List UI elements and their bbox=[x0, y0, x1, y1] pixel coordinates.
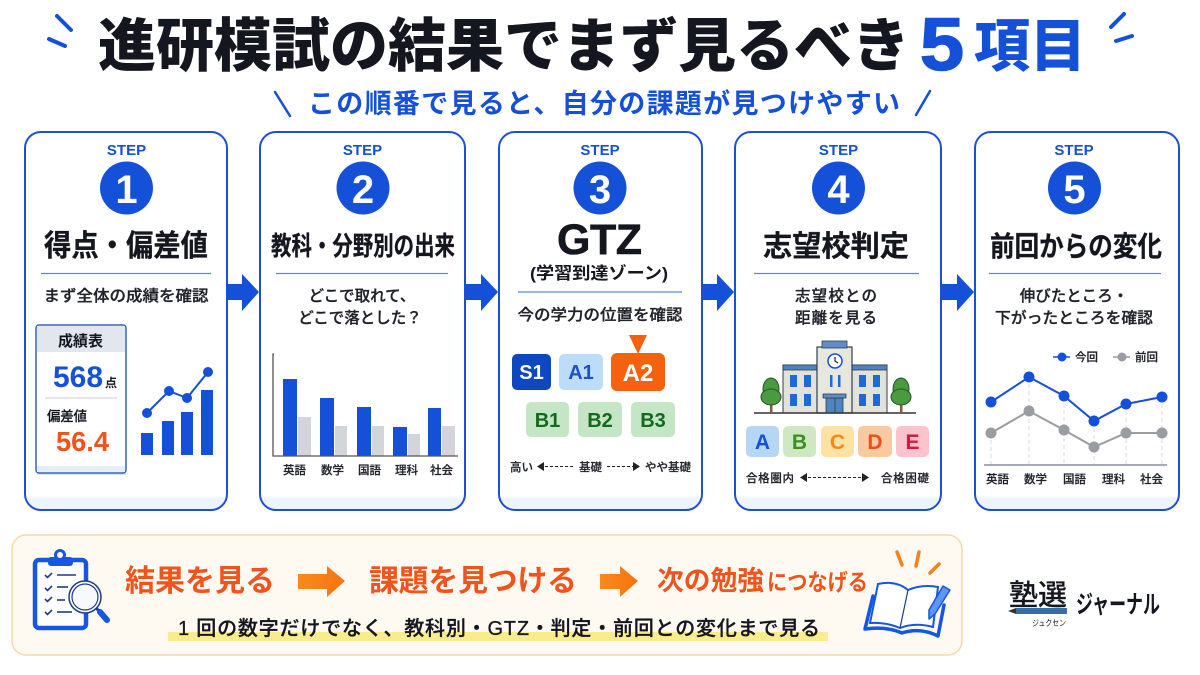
zone chips: A2 bbox=[623, 360, 653, 387]
text: step 5 description bbox=[995, 287, 1153, 327]
heading: step 1: 得点・偏差値 bbox=[44, 230, 208, 263]
text: find issues: 課題を見つける bbox=[369, 565, 577, 598]
text: step 4 description: 志望校との bbox=[795, 287, 877, 305]
panel: step 2 bbox=[260, 132, 465, 510]
arrow: step 3 to 4 bbox=[701, 274, 734, 311]
title bbox=[98, 3, 1086, 86]
grade scale: 合格圏内 bbox=[746, 471, 794, 485]
panel: step 5 bbox=[975, 132, 1179, 510]
zone chips: B3 bbox=[640, 410, 666, 432]
chart: line comparison: 社会 bbox=[1140, 472, 1163, 486]
zone scale: 高い bbox=[510, 460, 533, 474]
text: next study: 次の勉強 bbox=[657, 566, 764, 596]
panel: step 3: STEP bbox=[580, 142, 620, 159]
zone chips: A1 bbox=[568, 362, 594, 384]
text: step 2 description: どこで取れて、 bbox=[309, 287, 415, 305]
zone scale: やや基礎 bbox=[645, 460, 691, 474]
text: step 5 description: 下がったところを確認 bbox=[995, 308, 1153, 327]
highlight underline bbox=[168, 632, 828, 641]
grade chips: E bbox=[905, 431, 920, 454]
zone chips bbox=[512, 335, 675, 437]
title accent marks right bbox=[1111, 14, 1132, 41]
text: step 2 description: どこで落とした？ bbox=[298, 309, 422, 327]
text: step 2 description bbox=[298, 287, 422, 327]
score card: 568 bbox=[53, 361, 103, 394]
heading: step 2: 教科・分野別の出来 bbox=[271, 231, 455, 261]
chart: line comparison: 数学 bbox=[1024, 472, 1047, 486]
chart: line comparison: 理科 bbox=[1102, 472, 1125, 486]
text: summary note: 1 回の数字だけでなく、教科別・GTZ・判定・前回との変化まで見る bbox=[178, 617, 820, 640]
panel: step 5: STEP bbox=[1054, 142, 1094, 159]
logo: 塾選 bbox=[1009, 579, 1067, 612]
chart: bars by subject: 英語 bbox=[283, 463, 306, 477]
chart: bars by subject: 数学 bbox=[321, 463, 344, 477]
title accent marks left bbox=[49, 16, 71, 46]
text: step 1 description: まず全体の成績を確認 bbox=[44, 287, 209, 305]
logo bbox=[1008, 579, 1160, 628]
icon: open book and pencil bbox=[865, 583, 950, 636]
chart: line comparison bbox=[984, 372, 1168, 486]
text: step 4 description bbox=[795, 287, 877, 327]
chart: bars by subject: 国語 bbox=[358, 464, 381, 477]
icon: sparkle rays bbox=[897, 552, 939, 573]
panel: step 4 bbox=[735, 132, 941, 510]
panel: step 5: 5 bbox=[1063, 168, 1086, 212]
icon: clipboard with magnifier bbox=[35, 550, 107, 628]
chart: line comparison: 英語 bbox=[986, 472, 1009, 486]
panel: step 3 bbox=[499, 132, 702, 510]
grade chips: D bbox=[867, 431, 883, 454]
score card: 成績表 bbox=[58, 332, 103, 350]
zone scale: 基礎 bbox=[579, 460, 602, 474]
chart legend bbox=[1053, 350, 1158, 364]
logo: ジュクセン bbox=[1032, 618, 1066, 628]
panel: step 4: STEP bbox=[819, 142, 858, 159]
panel: step 2: 2 bbox=[352, 168, 374, 212]
arrow: flow 1 bbox=[298, 566, 345, 597]
panel: step 2: STEP bbox=[343, 142, 382, 159]
heading: step 4: 志望校判定 bbox=[763, 230, 909, 263]
panel: step 1: 1 bbox=[115, 168, 138, 212]
grade chips: A bbox=[755, 431, 770, 454]
score card: 偏差値 bbox=[47, 409, 87, 424]
text: next study: につなげる bbox=[767, 569, 868, 595]
score card bbox=[36, 325, 126, 475]
heading: step 3 bbox=[530, 216, 668, 283]
title: 項目 bbox=[974, 15, 1086, 79]
panel: step 1: STEP bbox=[107, 142, 146, 159]
subtitle: この順番で見ると、自分の課題が見つけやすい bbox=[308, 88, 900, 119]
score card: 点 bbox=[105, 375, 117, 390]
chart: score trend bbox=[141, 367, 213, 455]
arrow: step 1 to 2 bbox=[226, 274, 259, 311]
zone scale bbox=[510, 460, 691, 474]
panel: step 4: 4 bbox=[827, 168, 850, 212]
grade scale bbox=[746, 471, 930, 485]
arrow: flow 2 bbox=[600, 566, 638, 597]
text: step 3 description: 今の学力の位置を確認 bbox=[518, 306, 683, 324]
arrow: step 2 to 3 bbox=[465, 274, 498, 311]
panel: step 3: 3 bbox=[589, 168, 611, 212]
chart legend: 前回 bbox=[1135, 350, 1158, 364]
zone chips: S1 bbox=[519, 362, 544, 384]
heading: step 3: GTZ bbox=[557, 216, 642, 264]
logo: ジャーナル bbox=[1076, 591, 1160, 619]
zone chips: B2 bbox=[587, 410, 613, 432]
heading: step 3: (学習到達ゾーン) bbox=[530, 263, 668, 283]
panel: summary bbox=[12, 535, 962, 655]
zone chips: B1 bbox=[535, 410, 560, 432]
arrow: step 4 to 5 bbox=[941, 274, 974, 311]
grade chips: C bbox=[830, 431, 845, 454]
text: step 5 description: 伸びたところ・ bbox=[1020, 287, 1128, 305]
text: see results: 結果を見る bbox=[125, 565, 275, 598]
chart: line comparison: 国語 bbox=[1063, 473, 1086, 486]
grade chips: B bbox=[792, 431, 807, 454]
score card: 56.4 bbox=[56, 426, 109, 457]
title: 進研模試の結果でまず見るべき bbox=[98, 14, 910, 79]
chart legend: 今回 bbox=[1075, 350, 1098, 364]
text: step 4 description: 距離を見る bbox=[795, 309, 877, 327]
chart: bars by subject: 理科 bbox=[395, 463, 418, 477]
icon: school building bbox=[754, 341, 916, 413]
heading: step 5: 前回からの変化 bbox=[990, 231, 1162, 262]
panel: step 1 bbox=[25, 132, 227, 510]
chart: bars by subject: 社会 bbox=[430, 463, 453, 477]
title: 5 bbox=[920, 3, 964, 86]
text: next study bbox=[657, 566, 868, 596]
chart: bars by subject bbox=[273, 354, 458, 477]
grade scale: 合格困礎 bbox=[881, 471, 930, 485]
grade chips bbox=[746, 426, 929, 457]
icon: trees bbox=[761, 378, 911, 413]
